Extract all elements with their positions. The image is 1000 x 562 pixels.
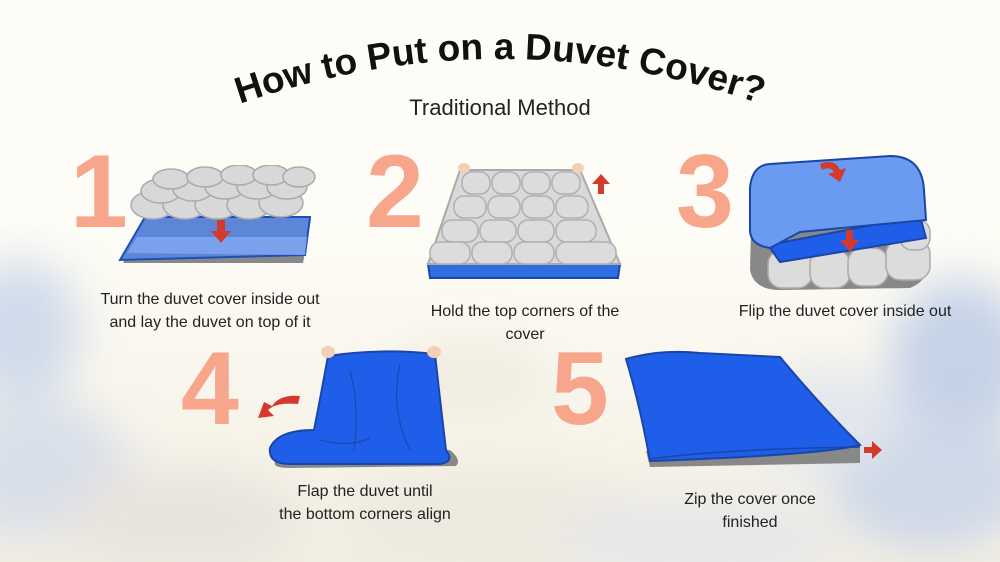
caption 5 — [684, 491, 816, 531]
illustration 1: duvet over cover — [118, 165, 316, 263]
caption 4: the bottom corners align — [279, 506, 451, 523]
caption 3: Flip the duvet cover inside out — [739, 303, 951, 320]
number 3: 3 — [676, 134, 734, 250]
number 2: 2 — [366, 134, 424, 250]
number 1: 1 — [70, 134, 128, 250]
number 5: 5 — [551, 331, 609, 447]
illustration 5: zipped cover — [624, 350, 882, 467]
illustration 2: hold top corners — [426, 163, 622, 279]
caption 2: cover — [505, 326, 545, 343]
arrow down — [211, 220, 231, 243]
illustration 4: flap duvet — [258, 346, 458, 468]
caption 5: finished — [722, 514, 778, 531]
caption 4: Flap the duvet until — [297, 483, 433, 500]
arrow up — [592, 174, 610, 194]
subtitle: Traditional Method — [409, 95, 591, 120]
arrows — [820, 162, 846, 182]
caption 2 — [431, 303, 619, 343]
illustration 3: flip cover — [749, 155, 931, 290]
arrow — [864, 441, 882, 459]
title: How to Put on a Duvet Cover? — [234, 34, 764, 103]
caption 4 — [279, 483, 451, 523]
arrow — [258, 396, 300, 418]
number 4: 4 — [181, 331, 239, 447]
caption 1: Turn the duvet cover inside out — [100, 291, 320, 308]
caption 5: Zip the cover once — [684, 491, 816, 508]
caption 1 — [100, 291, 320, 331]
caption 2: Hold the top corners of the — [431, 303, 619, 320]
caption 1: and lay the duvet on top of it — [109, 314, 311, 331]
